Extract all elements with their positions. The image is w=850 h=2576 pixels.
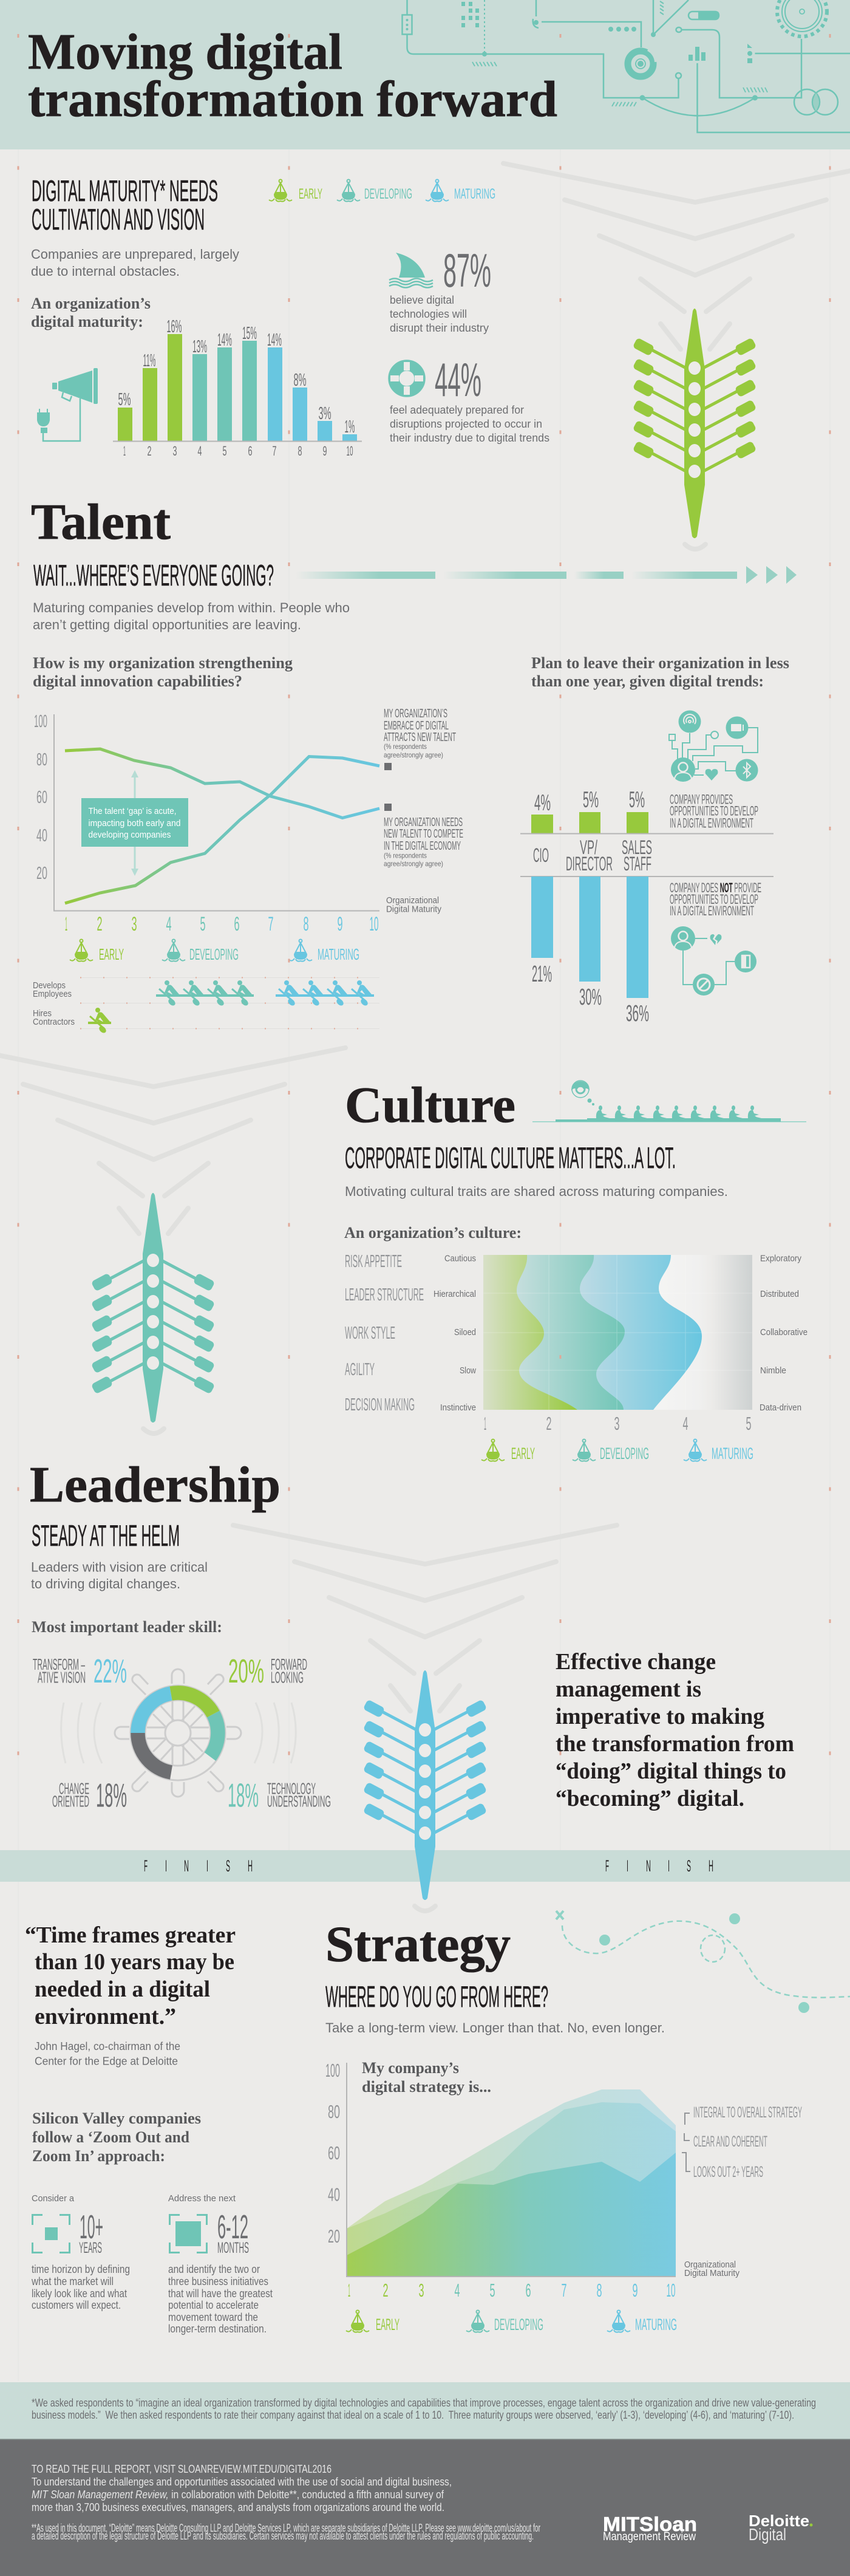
bar chart: digital maturity distribution: 14% [267,330,282,350]
section: strategy: MATURING [635,2315,677,2334]
intro text [33,600,350,632]
icon: disconnected person network [671,926,756,996]
report call to action: TO READ THE FULL REPORT, VISIT SLOANREVIEW.MIT.EDU/DIGITAL2016 [32,2463,332,2475]
intro text: Leaders with vision are critical [31,1560,208,1574]
line chart: innovation capabilities: 20 [36,864,47,883]
section: leadership: UNDERSTANDING [267,1792,331,1810]
icon: life ring [389,360,425,397]
footer [0,2439,850,2576]
quote attribution: Center for the Edge at Deloitte [35,2055,178,2068]
stream chart: organization culture: 3 [614,1413,619,1434]
intro text: Take a long-term view. Longer than that. No, even longer. [325,2020,665,2035]
series label: needs new talent [384,804,463,868]
stream chart: organization culture: Cautious [444,1254,476,1263]
maturity legend: EARLY [99,945,124,963]
bar chart: digital maturity distribution: 7 [272,443,277,459]
zoom in column: that will have the greatest [168,2287,273,2300]
icon: connected person network [669,711,758,782]
stream chart: organization culture: AGILITY [345,1360,375,1379]
heading: CULTIVATION AND VISION [32,203,205,236]
chart title: My company’s [362,2059,459,2077]
quote: needed in a digital [35,1976,210,2002]
stream chart: organization culture: 1 [484,1413,486,1434]
area chart: digital strategy: 80 [328,2101,340,2122]
title: Moving digital [28,24,342,80]
company does not provide label: COMPANY DOES NOT PROVIDE [670,880,761,895]
finish band: H [709,1857,713,1875]
chart title [362,2059,491,2096]
stream chart: organization culture [345,1252,807,1434]
icon: teal rowing boat [91,1193,215,1423]
stat: transformative vision: ATIVE VISION [38,1668,86,1686]
area chart: digital strategy: 1 [348,2280,350,2301]
section: leadership: 22% [93,1652,127,1690]
zoom in column: three business initiatives [168,2275,268,2287]
finish label right: F [605,1857,609,1875]
stat: 87%: technologies will [390,308,467,320]
diverging bar chart: plan to leave: 30% [579,985,602,1010]
series label: needs new talent: agree/strongly agree) [384,859,443,868]
stream chart: organization culture: Siloed [454,1327,476,1338]
axis label [386,895,441,915]
row label: hires contractors: Hires [33,1008,52,1019]
section: leadership: FORWARD [271,1655,307,1673]
line chart: innovation capabilities: 60 [36,788,47,807]
maturity legend: DEVELOPING [189,945,239,963]
intro text: aren’t getting digital opportunities are leaving. [33,617,301,632]
finish label left: I [165,1857,167,1875]
bar chart: digital maturity distribution: 2 [147,443,152,459]
line chart: innovation capabilities: 8 [304,913,308,935]
bar chart: digital maturity distribution: 1% [345,417,355,437]
logo: MIT Sloan: MITSloan [603,2513,697,2535]
maturity legend [346,2311,677,2334]
title [28,24,557,128]
bar chart: digital maturity distribution: 3% [318,404,332,423]
maturity legend [269,180,495,202]
diverging bar chart: plan to leave: 5% [629,787,645,812]
zoom in column: MONTHS [217,2239,249,2257]
stat: 44%: disruptions projected to occur in [390,418,542,430]
finish label right: I [627,1857,628,1875]
circuit illustration [402,0,850,132]
chart heading [31,295,151,330]
area chart: digital strategy: 6 [526,2280,531,2301]
logo: Deloitte Digital: Deloitte [749,2512,809,2530]
title: transformation forward [28,71,557,128]
finish label right [605,1857,713,1875]
axis label: Organizational [684,2260,736,2270]
callout statement: the transformation from [556,1731,794,1757]
logo: Deloitte Digital [749,2512,812,2544]
bar chart: digital maturity distribution: 8 [298,443,302,459]
row label: hires contractors [33,1008,75,1027]
row label: hires contractors: Contractors [33,1017,75,1027]
maturity legend [481,1440,753,1463]
bar chart: digital maturity distribution: 16% [166,317,182,337]
series label: embrace of digital: EMBRACE OF DIGITAL [384,719,449,733]
series label: needs new talent: MY ORGANIZATION NEEDS [384,816,463,829]
area chart: digital strategy: 60 [328,2142,340,2164]
series label: needs new talent: (% respondents [384,852,427,860]
series label: embrace of digital: (% respondents [384,742,427,751]
row label: develops employees: Employees [33,989,72,999]
icon: focus brackets large [170,2215,206,2252]
diverging bar chart: plan to leave [520,787,773,1027]
bar chart: digital maturity distribution: 3 [172,443,177,459]
heading: Strategy [325,1916,511,1973]
bar chart: digital maturity distribution: 4 [198,443,202,459]
intro text: Maturing companies develop from within. People who [33,600,350,615]
area chart: digital strategy: 7 [561,2280,567,2301]
section: digital maturity [31,175,549,459]
diverging bar chart: plan to leave: 36% [626,1001,649,1027]
section: culture: MATURING [712,1444,753,1463]
intro text: due to internal obstacles. [31,264,180,279]
zoom out column: time horizon by defining [32,2263,130,2275]
pictogram: develops employees vs hires contractors [33,978,379,1034]
intro text: Companies are unprepared, largely [31,247,239,262]
section: leadership: STEADY AT THE HELM [32,1520,180,1553]
finish label left [144,1857,253,1875]
stream chart: organization culture: 2 [546,1413,551,1434]
stat: 87% [389,244,491,334]
diverging bar chart: plan to leave: DIRECTOR [566,853,613,875]
bar chart: digital maturity distribution: 15% [242,324,257,343]
area chart: digital strategy [325,2059,802,2301]
section: digital maturity: DIGITAL MATURITY* NEEDS [32,175,218,208]
axis label [684,2260,739,2278]
section: talent: IN A DIGITAL ENVIRONMENT [670,815,753,831]
donut chart: ship wheel [61,1669,296,1797]
area chart: digital strategy: 8 [596,2280,602,2301]
chart heading left: digital innovation capabilities? [33,672,242,690]
area chart: digital strategy: 5 [489,2280,495,2301]
quote attribution: John Hagel, co-chairman of the [35,2040,180,2052]
stat: technology understanding: 18% [228,1776,259,1814]
icon: blue rowing boat [363,1670,487,1900]
diverging bar chart: plan to leave: 4% [534,790,551,815]
callout statement: imperative to making [556,1704,764,1729]
callout: talent gap: The talent ‘gap’ is acute, [89,806,176,816]
stat: forward looking: 20% [228,1652,264,1690]
icon: megaphone and plug [37,368,98,441]
bar chart: digital maturity distribution: 5 [222,443,227,459]
chart heading: digital maturity: [31,313,143,330]
maturity legend: MATURING [318,945,359,963]
bar chart: digital maturity distribution: 6 [248,443,253,459]
intro text: to driving digital changes. [31,1576,180,1591]
diverging bar chart: plan to leave: CIO [533,844,549,866]
quote: “Time frames greater [25,1922,236,1948]
line chart: innovation capabilities [34,707,463,935]
approach heading: Zoom In’ approach: [32,2147,165,2165]
callout: talent gap: impacting both early and [89,818,181,828]
chart heading: Most important leader skill: [32,1618,222,1636]
stream chart: organization culture: RISK APPETITE [345,1252,402,1271]
finish label right: I [668,1857,670,1875]
series label: embrace of digital: ATTRACTS NEW TALENT [384,731,456,744]
area chart: digital strategy: 9 [633,2280,638,2301]
icon: focus brackets small [33,2215,69,2252]
line chart: innovation capabilities: 3 [131,913,137,935]
line chart: innovation capabilities: 4 [166,913,171,935]
row label: develops employees: Develops [33,980,66,991]
section: talent: NEW TALENT TO COMPETE [384,827,463,841]
stream chart: organization culture: Nimble [760,1365,786,1376]
report call to action: more than 3,700 business executives, managers, and analysts from organizations around the world. [32,2501,444,2513]
stat: change oriented: ORIENTED [52,1792,89,1810]
stat: transformative vision: TRANSFORM – [33,1655,85,1673]
line chart: innovation capabilities: 1 [65,913,67,935]
bar chart: digital maturity distribution: 13% [192,337,207,357]
stream chart: organization culture: Distributed [760,1289,799,1299]
zoom out column: likely look like and what [32,2287,127,2300]
stream chart: organization culture: Hierarchical [433,1289,476,1299]
area chart: digital strategy: 20 [328,2226,340,2247]
report call to action [32,2463,452,2513]
zoom out column: 10+ [80,2208,103,2246]
area chart: digital strategy: 2 [382,2280,389,2301]
stream chart: organization culture: Slow [460,1365,476,1376]
chart heading left [33,654,293,690]
chart heading: An organization’s culture: [344,1224,522,1242]
area chart: digital strategy: 4 [454,2280,460,2301]
stat: 87%: 87% [443,244,491,297]
line chart: innovation capabilities: 100 [34,712,47,731]
company does not provide label [670,880,761,918]
chart heading right: than one year, given digital trends: [531,672,764,690]
section: talent [31,494,797,1034]
heading: Leadership [30,1457,280,1513]
diverging bar chart: plan to leave: STAFF [624,853,651,875]
stream chart: organization culture: Exploratory [760,1254,801,1263]
zoom out column [31,2193,130,2311]
maturity legend: DEVELOPING [364,186,412,202]
zoom in column [168,2193,273,2335]
report call to action: To understand the challenges and opportunities associated with the use of social and digital business, [32,2476,452,2488]
callout statement: management is [556,1676,701,1702]
series label: embrace of digital [384,707,456,770]
chart heading right [531,654,789,690]
diverging bar chart: plan to leave: VP/ [580,836,597,858]
line chart: innovation capabilities: 6 [234,913,239,935]
line chart: innovation capabilities: 10 [369,913,379,935]
finish label right: S [687,1857,691,1875]
zoom out column: what the market will [31,2275,114,2287]
approach heading: Silicon Valley companies [32,2110,201,2127]
logo: Deloitte Digital: Digital [749,2525,786,2544]
line chart: innovation capabilities: 7 [268,913,273,935]
stream chart: organization culture: Instinctive [440,1402,476,1413]
area chart: digital strategy: 10 [667,2280,675,2301]
quote: environment.” [35,2004,176,2029]
company does not provide label: IN A DIGITAL ENVIRONMENT [670,903,754,918]
zoom out column: Consider a [32,2193,75,2204]
chart heading: An organization’s [31,295,151,312]
chart heading left: How is my organization strengthening [33,654,293,672]
heading: Talent [31,494,171,550]
zoom in column: Address the next [168,2193,236,2204]
oar chevrons: developing boat [0,1048,345,1433]
maturity legend: EARLY [511,1444,535,1463]
maturity legend: DEVELOPING [600,1444,649,1463]
axis label: Organizational [386,895,439,906]
company provides label: COMPANY PROVIDES [670,792,733,807]
quote [25,1922,236,2029]
maturity legend: DEVELOPING [494,2315,543,2334]
intro text: Motivating cultural traits are shared across maturing companies. [345,1184,728,1199]
finish label left: F [144,1857,148,1875]
callout: talent gap [81,798,188,847]
area chart: digital strategy: 100 [325,2060,340,2081]
stream chart: organization culture: LEADER STRUCTURE [345,1285,424,1305]
logo: MIT Sloan: Management Review [603,2530,696,2543]
callout statement: “becoming” digital. [556,1786,744,1811]
zoom out column: YEARS [79,2239,102,2257]
bar chart: digital maturity distribution: 1 [123,443,126,459]
bar chart: digital maturity distribution: 8% [294,371,306,390]
stream chart: organization culture: 4 [682,1413,688,1434]
oar chevrons: early boat [503,163,850,549]
finish label right: N [646,1857,651,1875]
diverging bar chart: plan to leave: SALES [622,836,652,858]
stream chart: organization culture: Data-driven [760,1402,801,1413]
line chart: innovation capabilities: 40 [36,826,47,846]
axis label: Digital Maturity [684,2268,739,2278]
zoom out column: customers will expect. [32,2299,121,2311]
finish label left: N [184,1857,189,1875]
arrow: talent gap [131,770,138,876]
arrow: progress bars [296,566,797,584]
heading [32,175,218,236]
callout: talent gap: developing companies [89,830,171,840]
heading: Culture [345,1077,515,1133]
company provides label [670,792,758,831]
bar chart: digital maturity distribution: 9 [323,443,327,459]
section: leadership [30,1457,794,1814]
line chart: innovation capabilities: 80 [36,750,47,770]
finish label left: I [206,1857,208,1875]
stream chart: organization culture: WORK STYLE [345,1324,395,1343]
quote attribution [35,2040,180,2068]
stat: forward looking: LOOKING [271,1668,304,1686]
maturity legend [70,939,359,963]
section: leadership: 18% [96,1776,127,1814]
quote: than 10 years may be [35,1949,234,1975]
bar chart: digital maturity distribution: 10 [346,443,353,459]
stream chart: organization culture: 5 [746,1413,752,1434]
series label: needs new talent: IN THE DIGITAL ECONOMY [384,839,461,853]
report call to action: MIT Sloan Management Review, in collaboration with Deloitte**, conducted a fifth annual survey of [32,2489,444,2501]
stat: technology understanding [228,1776,331,1814]
maturity legend: MATURING [454,186,495,202]
stat: 44%: 44% [435,353,481,406]
diverging bar chart: plan to leave: 5% [583,787,599,812]
line chart: innovation capabilities: 9 [338,913,342,935]
stat: change oriented: CHANGE [59,1780,89,1798]
header band [0,0,850,149]
stat: 44%: feel adequately prepared for [390,404,524,416]
diverging bar chart: plan to leave: 21% [532,962,552,987]
stat: transformative vision [33,1652,127,1690]
stat: 87%: disrupt their industry [390,322,489,334]
stat: 87%: believe digital [390,294,454,306]
maturity legend: EARLY [299,186,322,202]
approach heading [32,2110,201,2165]
row label: develops employees [33,980,72,999]
finish band [0,1850,850,1882]
bar chart: digital maturity distribution: 14% [217,330,232,350]
stat: technology understanding: TECHNOLOGY [267,1780,316,1798]
approach heading: follow a ‘Zoom Out and [32,2128,190,2146]
series label: embrace of digital: MY ORGANIZATION’S [384,707,447,720]
icon: treasure map dashed path [556,1911,850,2013]
icon: shark fin [389,253,433,288]
section: strategy: WHERE DO YOU GO FROM HERE? [325,1981,548,2014]
rowers: maturing [276,980,374,1007]
callout statement: “doing” digital things to [556,1758,786,1784]
area chart: digital strategy: 3 [419,2280,424,2301]
series labels [682,2104,802,2181]
oar chevrons: maturing boat [233,1525,617,1911]
intro text [31,1560,208,1591]
icon: crew boat and donut [532,1081,806,1122]
stream chart: organization culture: Collaborative [760,1327,807,1338]
stat: change oriented [52,1776,127,1814]
section: strategy [25,1911,850,2335]
series label: embrace of digital: agree/strongly agree) [384,751,443,759]
stat: 44%: their industry due to digital trends [390,432,549,444]
maturity legend: EARLY [376,2315,399,2334]
methodology note band [0,2382,850,2439]
bar chart: digital maturity distribution: 11% [143,351,155,371]
finish label left: S [226,1857,230,1875]
zoom in column: longer-term destination. [168,2323,267,2335]
bar chart: digital maturity distribution: 5% [118,390,131,409]
area chart: digital strategy: 40 [328,2184,340,2205]
zoom in column: movement toward the [168,2311,258,2323]
zoom in column: and identify the two or [168,2263,260,2275]
section: culture [344,1077,807,1463]
legal text [32,2522,540,2542]
stream chart: organization culture: DECISION MAKING [345,1395,415,1415]
line chart: innovation capabilities: 2 [97,913,102,935]
intro text [31,247,239,279]
rowers: developing [156,980,254,1007]
callout statement: Effective change [556,1649,716,1675]
finish band: H [248,1857,253,1875]
chart heading right: Plan to leave their organization in less [531,654,789,672]
bar chart: digital maturity distribution [113,317,362,459]
zoom in column: 6-12 [217,2208,248,2246]
chart title: digital strategy is... [362,2078,491,2096]
line chart: innovation capabilities: 5 [200,913,205,935]
axis label: Digital Maturity [386,904,441,915]
zoom in column: potential to accelerate [168,2299,259,2311]
rower: early [88,1008,111,1034]
registration dots [18,34,830,1755]
stat: 44% [389,353,549,444]
icon: green rowing boat [633,309,756,538]
callout statement [556,1649,794,1811]
section: talent: WAIT...WHERE’S EVERYONE GOING? [33,559,274,592]
